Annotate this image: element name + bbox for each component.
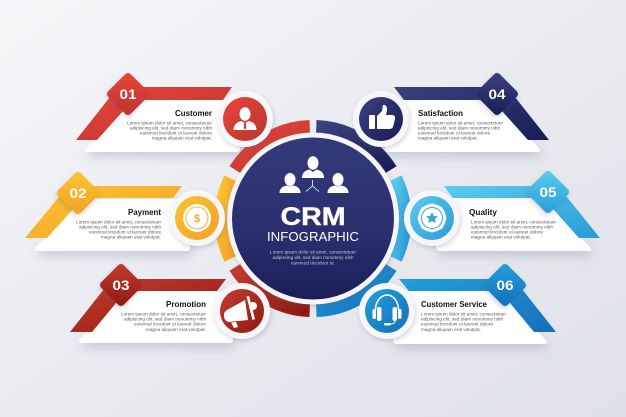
- icon: headset: [359, 283, 415, 339]
- panel: 04 satisfaction: [353, 71, 549, 152]
- panel: 02 payment: 02: [70, 185, 87, 201]
- icon: customer: [217, 91, 273, 147]
- panel: 01 customer: adipiscing elit, sed diam nonummy nibh: [130, 126, 212, 131]
- icon: megaphone: [214, 283, 270, 339]
- panel: 02 payment: [25, 170, 225, 251]
- panel: 05 quality: adipiscing elit, sed diam nonummy nibh: [471, 225, 553, 230]
- panel: 03 promotion: [70, 262, 270, 343]
- panel: 04 satisfaction: magna aliquam erat volutpat.: [418, 136, 478, 141]
- center text: euismod tincidunt ut.: [291, 261, 335, 266]
- panel: 05 quality: magna aliquam erat volutpat.: [471, 235, 531, 240]
- panel: 06 customer service: magna aliquam erat volutpat.: [421, 327, 481, 332]
- panel: 02 payment: magna aliquam erat volutpat.: [101, 235, 161, 240]
- panel: 01 customer: 01: [120, 86, 137, 102]
- central circle: [227, 132, 399, 304]
- panel: 01 customer: Customer: [175, 109, 212, 118]
- panel: 06 customer service: Lorem ipsum dolor sit amet, consectetuer: [421, 312, 506, 317]
- panel: 05 quality: 05: [540, 184, 557, 200]
- panel: 01 customer: magna aliquam erat volutpat.: [152, 136, 212, 141]
- center text: Lorem ipsum dolor sit amet, consectetuer: [270, 250, 356, 255]
- icon: three people: [280, 156, 348, 193]
- panel: 04 satisfaction: adipiscing elit, sed diam nonummy nibh: [418, 126, 500, 131]
- title: CRM: CRM: [280, 203, 346, 231]
- icon: badge: [404, 190, 460, 246]
- panel: 06 customer service: [359, 262, 556, 344]
- segmented ring: [221, 126, 405, 310]
- panel: 03 promotion: Lorem ipsum dolor sit amet, consectetuer: [121, 312, 206, 317]
- panel: 06 customer service: adipiscing elit, sed diam nonummy nibh: [421, 317, 503, 322]
- panel: 02 payment: Lorem ipsum dolor sit amet, consectetuer: [76, 220, 161, 225]
- panel: 03 promotion: magna aliquam erat volutpat.: [146, 327, 206, 332]
- center text: [270, 250, 356, 266]
- subtitle: infographic: INFOGRAPHIC: [267, 230, 359, 244]
- panel: 01 customer: euismod tincidunt ut laoreet dolore: [140, 131, 212, 136]
- panel: 06 customer service: Customer Service: [421, 300, 488, 309]
- panel: 02 payment: Payment: [128, 208, 161, 217]
- panel: 05 quality: euismod tincidunt ut laoreet dolore: [471, 230, 543, 235]
- panel: 01 customer: [76, 71, 273, 152]
- center text: adipiscing elit, sed diam nonummy nibh: [272, 255, 354, 260]
- panel: 04 satisfaction: euismod tincidunt ut laoreet dolore: [418, 131, 490, 136]
- icon: coin: [169, 190, 225, 246]
- panel: 03 promotion: 03: [112, 277, 130, 293]
- panel: 02 payment: adipiscing elit, sed diam nonummy nibh: [79, 225, 161, 230]
- icon: coin: $: [194, 213, 200, 225]
- panel: 05 quality: Quality: [469, 208, 498, 217]
- panel: 03 promotion: adipiscing elit, sed diam nonummy nibh: [124, 317, 206, 322]
- panel: 04 satisfaction: 04: [488, 86, 506, 102]
- panel: 02 payment: euismod tincidunt ut laoreet dolore: [89, 230, 161, 235]
- panel: 05 quality: [404, 169, 600, 251]
- panel: 04 satisfaction: Satisfaction: [418, 109, 463, 118]
- panel: 01 customer: Lorem ipsum dolor sit amet, consectetuer: [127, 121, 212, 126]
- panel: 06 customer service: 06: [496, 277, 514, 293]
- icon: thumbs up: [353, 91, 409, 147]
- panel: 06 customer service: euismod tincidunt ut laoreet dolore: [421, 322, 493, 327]
- panel: 05 quality: Lorem ipsum dolor sit amet, consectetuer: [471, 220, 556, 225]
- panel: 03 promotion: euismod tincidunt ut laoreet dolore: [134, 322, 206, 327]
- panel: 03 promotion: Promotion: [166, 300, 206, 309]
- panel: 04 satisfaction: Lorem ipsum dolor sit amet, consectetuer: [418, 121, 503, 126]
